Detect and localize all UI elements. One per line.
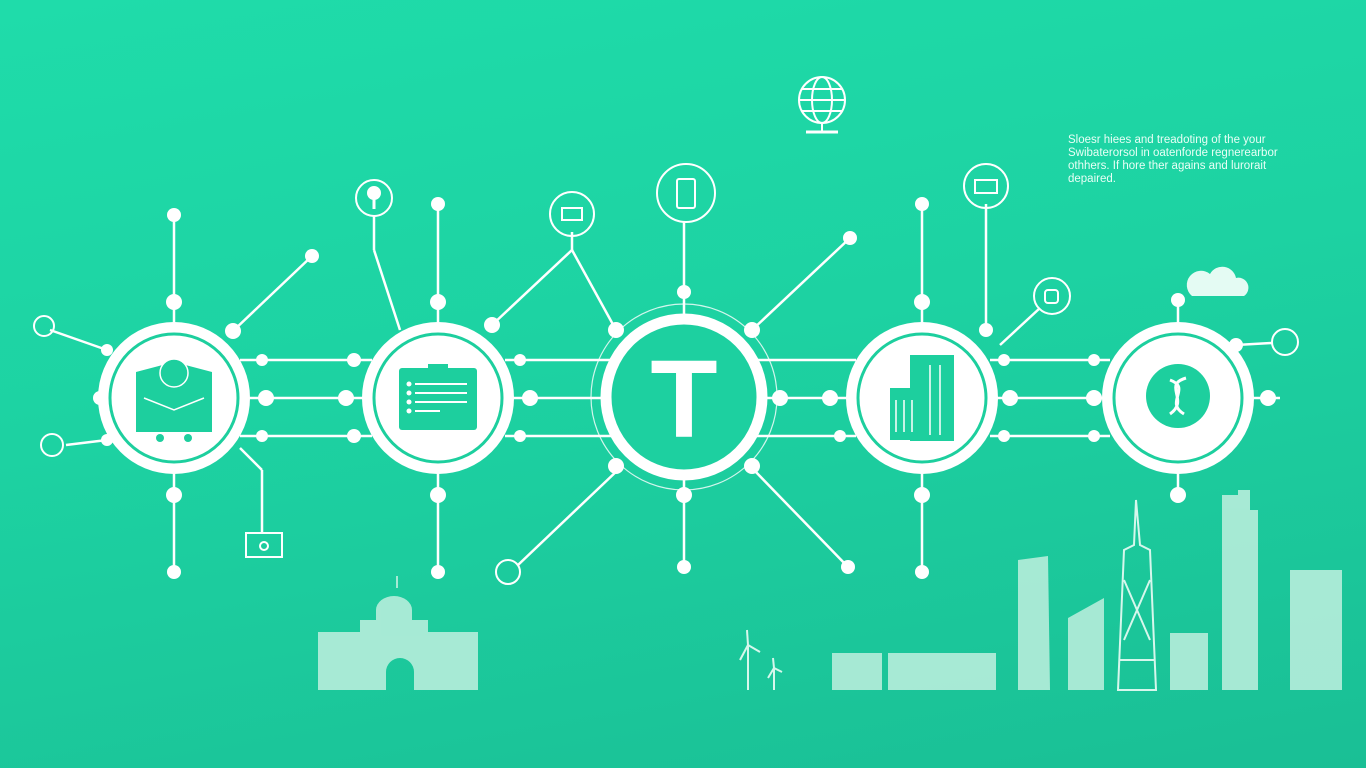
hub 1 xyxy=(98,322,250,474)
text block: Sloesr hiees and treadoting of the your Swibaterorsol in oatenforde regnerearbor othhers. If hore ther agains and lurorait depaired. xyxy=(1068,134,1278,185)
verticals xyxy=(173,215,175,330)
skyline xyxy=(318,490,1342,690)
diagonals xyxy=(233,256,312,331)
small icons xyxy=(34,77,1298,584)
hub 2 xyxy=(362,322,514,474)
hub 3: T xyxy=(650,338,718,461)
hub 5 xyxy=(1102,322,1254,474)
hub 3 xyxy=(591,304,777,490)
horizontals xyxy=(240,359,372,361)
hub 4 xyxy=(846,322,998,474)
cloud xyxy=(1187,267,1248,296)
